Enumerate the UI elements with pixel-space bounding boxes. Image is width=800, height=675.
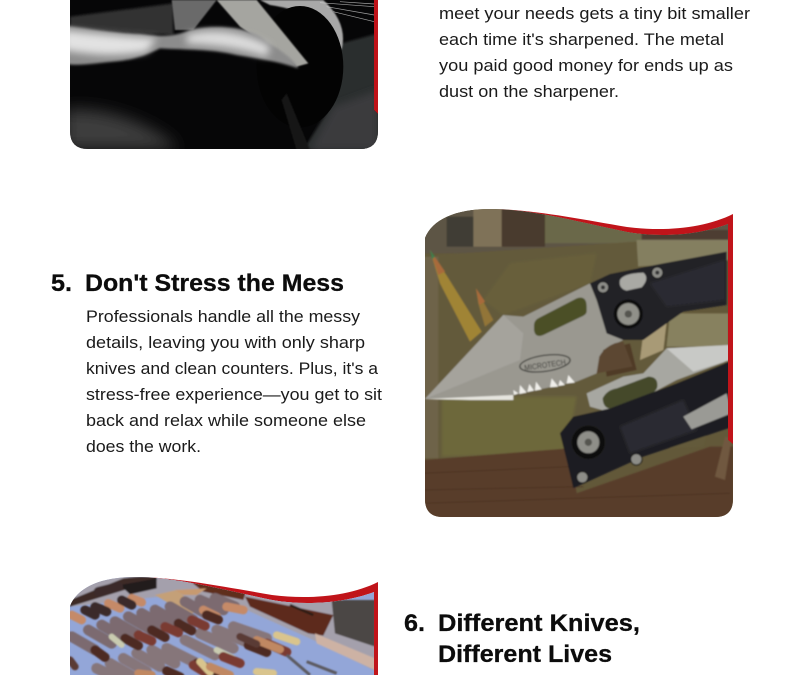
knife 2 handle xyxy=(560,360,733,488)
text block: reason 5 body: Professionals handle all the messy xyxy=(86,308,361,326)
panel: photo of two folding knives on camo and wood xyxy=(423,205,735,520)
heading: reason 6: Different Lives xyxy=(438,641,612,668)
text block: reason 4 body: dust on the sharpener. xyxy=(439,83,619,101)
knife 1 handle xyxy=(590,252,727,340)
text block: reason 5 body: stress-free experience—you get to sit xyxy=(86,386,382,404)
heading: reason 6: Different Knives, xyxy=(438,610,640,637)
text block: reason 4 body: each time it's sharpened. The metal xyxy=(439,31,724,49)
knife 2 blade xyxy=(587,345,730,413)
camo strip at top xyxy=(423,207,733,253)
text block: reason 5 body: does the work. xyxy=(86,438,201,456)
text block: reason 4 body: you paid good money for ends up as xyxy=(439,57,733,75)
text block: reason 5 body: back and relax while someone else xyxy=(86,412,366,430)
text block: reason 5 body: details, leaving you with only sharp xyxy=(86,334,365,352)
knife 1 blade xyxy=(425,283,633,400)
knife 1 blade: MICROTECH xyxy=(524,358,567,373)
knife handles xyxy=(70,587,297,675)
text block: reason 5 body xyxy=(86,308,382,456)
heading: reason 6 xyxy=(404,610,640,668)
text block: reason 5 body: knives and clean counters. Plus, it's a xyxy=(86,360,379,378)
text block: reason 4 body xyxy=(439,5,751,101)
heading: reason 5: 5. xyxy=(51,270,72,297)
heading: reason 6: 6. xyxy=(404,610,425,637)
text block: reason 4 body: meet your needs gets a tiny bit smaller xyxy=(439,5,751,23)
back table and boxes xyxy=(70,575,377,672)
bullets xyxy=(430,250,732,480)
olive pouch xyxy=(437,242,730,458)
knife blades xyxy=(72,598,267,675)
panel: photo of handmade knives on display table xyxy=(70,575,378,675)
heading: reason 5: Don't Stress the Mess xyxy=(85,270,344,297)
panel: photo of hands sharpening a knife on a grinding wheel xyxy=(60,0,378,150)
wood table xyxy=(423,447,733,520)
